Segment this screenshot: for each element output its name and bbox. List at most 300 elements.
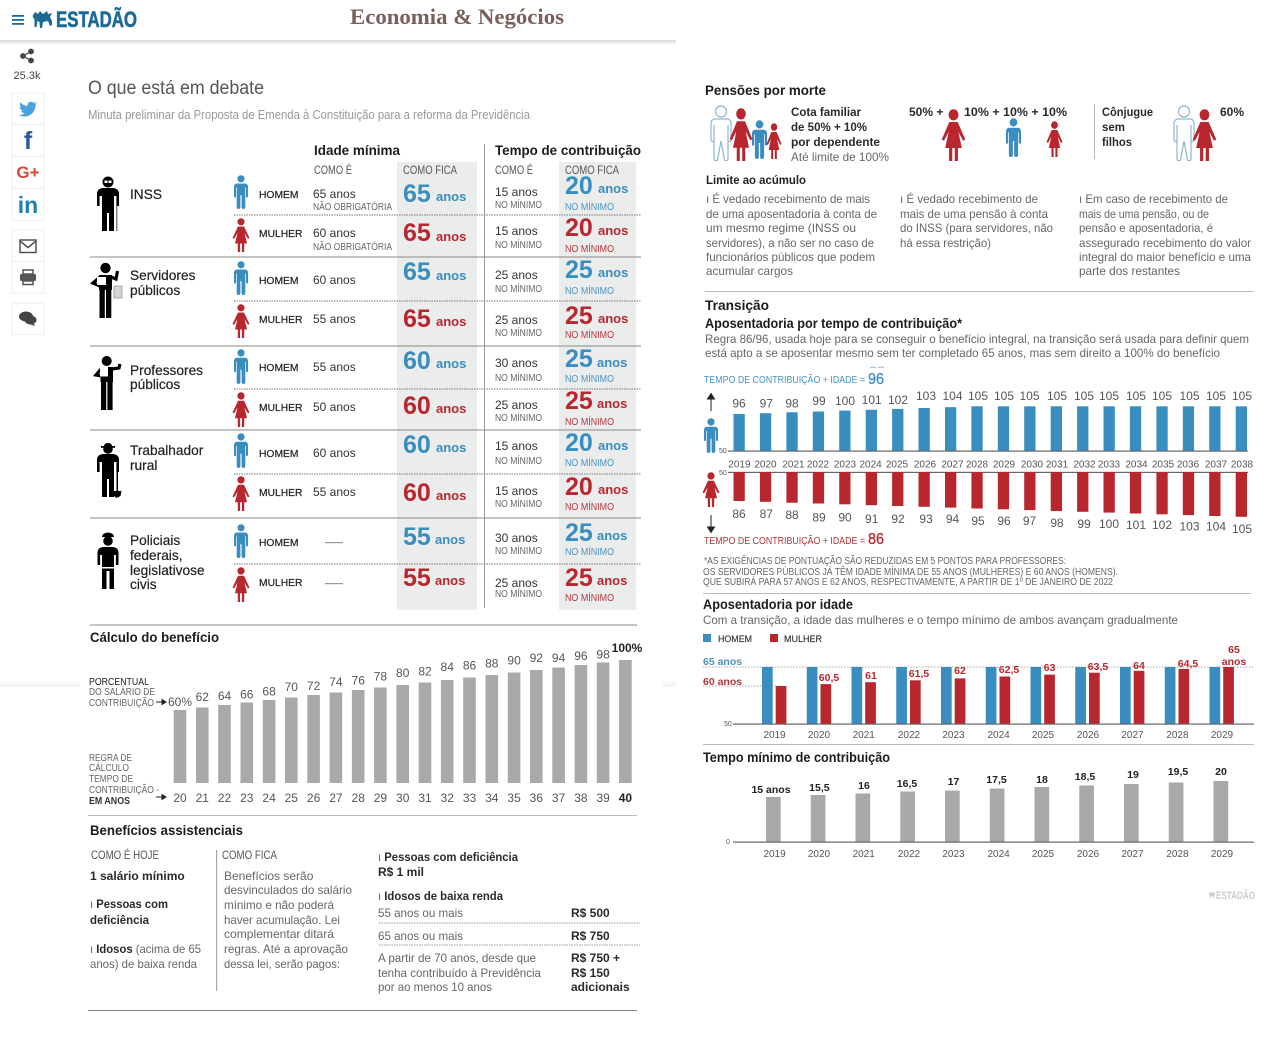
row: servidores mulher: NO MÍNIMO (565, 328, 614, 341)
values: women: 98 (1050, 516, 1064, 530)
legend (703, 634, 822, 645)
bars (766, 781, 1228, 842)
values: men: 96 (732, 396, 746, 410)
row: professores homem: anos (436, 356, 466, 371)
label: públicos (130, 377, 180, 392)
highlighted como fica columns (397, 162, 636, 610)
column: como é hoje: ı Pessoas com (90, 897, 168, 911)
axis and years: 2026 (914, 460, 937, 470)
axis and years: 2019 (763, 730, 786, 741)
row: rural homem: NO MÍNIMO (495, 454, 542, 467)
year labels: 27 (329, 791, 343, 805)
row: rural homem: 15 anos (495, 439, 538, 453)
row: servidores mulher: 25 (565, 302, 593, 330)
icon: menu (12, 15, 24, 25)
row: servidores homem: NO MÍNIMO (495, 282, 542, 295)
axis and years: 2023 (942, 730, 965, 741)
percentage labels: 74 (329, 675, 343, 689)
row: professores mulher: NO MÍNIMO (495, 411, 542, 424)
values: men: 100 (835, 394, 855, 408)
year labels: 31 (418, 791, 432, 805)
values: men: 105 (1019, 389, 1040, 403)
axis and years: 2034 (1125, 460, 1148, 470)
heading: Benefícios assistenciais (90, 823, 243, 838)
values: 61 (865, 670, 877, 682)
values: women: 104 (1206, 520, 1226, 534)
values: women: 94 (946, 512, 959, 526)
percentage labels: 98 (596, 648, 610, 662)
label (130, 363, 203, 392)
axis and years: 2033 (1098, 460, 1121, 470)
percentage labels: 80 (396, 666, 410, 680)
icon: teacher (96, 356, 120, 410)
limit column 1: acumular cargos (706, 264, 793, 278)
subtitle: Minuta preliminar da Proposta de Emenda à Constituição para a reforma da Previdência (88, 108, 530, 122)
icon: retiree with cane (97, 176, 119, 231)
row: servidores homem: 25 (565, 256, 593, 284)
values: women: 100 (1099, 517, 1119, 531)
axis and years: 50 (719, 470, 727, 477)
label: men score: 96 (868, 371, 884, 388)
arrow: down (708, 515, 714, 532)
row: servidores homem: HOMEM (259, 276, 298, 287)
source logo: ESTADÃO (1216, 889, 1255, 902)
column: valores: 65 anos ou mais (378, 929, 463, 943)
column: valores (378, 850, 640, 994)
row: servidores homem: 65 (403, 258, 431, 286)
row: INSS homem: 20 (565, 172, 593, 200)
row: policiais mulher: 25 anos (495, 576, 538, 590)
row: INSS homem: 65 anos (313, 187, 356, 201)
bars: women (734, 472, 1247, 517)
row: rural homem: anos (436, 440, 466, 455)
year labels: 21 (196, 791, 209, 805)
panel: cálculo do benefício (88, 630, 643, 816)
values: 16 (858, 780, 870, 792)
label: women score (704, 531, 884, 548)
column: como é hoje: anos) de baixa renda (90, 957, 197, 971)
row: professores homem: NO MÍNIMO (495, 371, 542, 384)
column: como fica: desvinculados do salário (224, 883, 352, 897)
percentage labels: 78 (374, 670, 387, 684)
values: men: 103 (916, 389, 936, 403)
panel: minimum age and contribution table (90, 143, 641, 625)
heading: Aposentadoria por idade (703, 597, 853, 612)
row: policiais homem: NO MÍNIMO (565, 545, 614, 558)
percentage labels: 88 (485, 656, 499, 670)
row: professores homem: 25 (565, 345, 593, 373)
column: valores: ı Pessoas com deficiência (378, 850, 518, 864)
axis captions: DO SALÁRIO DE (89, 685, 155, 698)
quota breakdown: 10% + 10% + 10% (964, 105, 1067, 119)
axis and years (719, 448, 1254, 477)
label (130, 443, 204, 473)
column: valores: R$ 750 (571, 929, 610, 943)
values: 15,5 (809, 782, 830, 794)
row: INSS homem: HOMEM (259, 190, 298, 201)
axis and years: 2029 (1211, 730, 1234, 741)
row: professores mulher: 25 anos (495, 398, 538, 412)
description: Com a transição, a idade das mulheres e o tempo mínimo de ambos avançam gradualmente (703, 613, 1178, 627)
row: servidores homem: anos (436, 268, 466, 283)
row: professores mulher: NO MÍNIMO (565, 415, 614, 428)
row: rural mulher: 20 (565, 473, 593, 501)
values: anos (1222, 656, 1246, 668)
family quota text: Até limite de 100% (791, 150, 889, 164)
axis and years: 2024 (987, 849, 1010, 860)
row: rural homem: 20 (565, 429, 593, 457)
axis and years: 2037 (1205, 460, 1228, 470)
column: valores: R$ 500 (571, 906, 610, 920)
icon: comments (19, 312, 36, 326)
values: 65 (1228, 644, 1240, 656)
values: men: 105 (968, 389, 988, 403)
share count: 25.3k (14, 70, 41, 82)
axis and years: 2020 (754, 460, 777, 470)
limit column 2: mais de uma pensão à conta (900, 207, 1048, 221)
family quota text: Cota familiar (791, 105, 861, 119)
limit column 1: ı É vedado recebimento de mais (706, 191, 870, 206)
values: women: 87 (760, 507, 773, 521)
values: women: 95 (971, 514, 985, 528)
limit column 1: um mesmo regime (INSS ou (706, 221, 856, 235)
row: servidores mulher: 25 anos (495, 313, 538, 327)
row: professores homem: 60 (403, 347, 431, 375)
icon: woman (702, 472, 720, 507)
legend: HOMEM (718, 634, 752, 645)
row: servidores homem: anos (598, 265, 628, 280)
percentage labels: 92 (530, 651, 543, 665)
icon: linkedin: in (18, 192, 38, 218)
source logo (1209, 889, 1255, 902)
bars: men (762, 667, 1220, 724)
icon: facebook: f (24, 127, 33, 155)
footnote (703, 554, 1118, 588)
percentage labels: 64 (218, 689, 231, 703)
column: como é hoje: ı Idosos (acima de 65 (90, 942, 201, 956)
column: como fica: mínimo e não poderá (224, 898, 334, 912)
values: men: 105 (1206, 389, 1226, 403)
axis captions: EM ANOS (89, 795, 130, 807)
values (819, 644, 1246, 684)
row: policiais mulher: 25 (565, 564, 593, 592)
heading: Cálculo do benefício (90, 630, 219, 645)
axis and years: 2022 (898, 849, 921, 860)
row: policiais mulher: anos (435, 573, 465, 588)
values: men: 102 (888, 393, 908, 407)
values: 62 (954, 665, 966, 677)
icon: police officer (98, 532, 118, 589)
percentage labels: 84 (441, 660, 454, 674)
row: INSS mulher: MULHER (259, 229, 302, 240)
column: valores: R$ 150 (571, 966, 610, 980)
axis and years: 2026 (1077, 849, 1100, 860)
values: 63 (1044, 662, 1055, 674)
axis and years: 2026 (1077, 730, 1100, 741)
percentage labels: 96 (574, 649, 588, 663)
row: rural mulher: MULHER (259, 488, 302, 499)
row: rural homem: anos (598, 438, 628, 453)
row: servidores mulher (232, 302, 628, 341)
limit column 2: ı É vedado recebimento de (900, 191, 1038, 206)
row: policiais homem (234, 519, 627, 558)
arrow: up (708, 394, 714, 411)
axis and years: 2021 (853, 730, 875, 741)
label: men score (704, 367, 884, 388)
row: servidores mulher: 65 (403, 305, 431, 333)
family quota text (791, 105, 889, 164)
reference labels: 60 anos (703, 676, 742, 688)
row: professores mulher: 50 anos (313, 400, 356, 414)
row: servidores homem: NO MÍNIMO (565, 284, 614, 297)
values: women: 86 (732, 507, 746, 521)
values: men: 99 (812, 394, 826, 408)
panel: benefícios assistenciais (88, 823, 640, 1011)
percentage labels (168, 641, 643, 709)
axis and years: 2023 (834, 460, 857, 470)
values: 17,5 (986, 774, 1007, 786)
values: 19,5 (1168, 766, 1188, 778)
row: INSS mulher: NÃO OBRIGATÓRIA (313, 240, 392, 253)
values: men: 105 (1126, 389, 1146, 403)
description (705, 332, 1249, 360)
values (751, 766, 1227, 796)
row: INSS homem: 65 (403, 180, 431, 208)
axis and years: 50 (719, 448, 727, 455)
row: rural homem: NO MÍNIMO (565, 456, 614, 469)
year labels: 22 (218, 791, 231, 805)
year labels (173, 791, 632, 805)
quota breakdown (909, 105, 1067, 161)
limit column 2 (900, 191, 1053, 250)
axis captions: CÁLCULO (89, 761, 129, 774)
row: professores homem: 55 anos (313, 360, 356, 374)
percentage labels: 76 (352, 674, 365, 688)
column: como fica: regras. Até a aprovação (224, 942, 348, 956)
percentage labels: 100% (612, 641, 643, 655)
row: professores mulher: 60 (403, 392, 431, 420)
row: professores mulher: anos (597, 396, 627, 411)
column: como é hoje: deficiência (90, 913, 149, 927)
values: 19 (1127, 769, 1139, 781)
spouse without children: Cônjugue (1102, 105, 1153, 119)
row: rural mulher: anos (436, 488, 466, 503)
label: Professores (130, 363, 203, 378)
axis and years: 2025 (1032, 730, 1055, 741)
column: valores: adicionais (571, 980, 630, 994)
row: INSS mulher: 65 (403, 219, 431, 247)
row: policiais homem: 55 (403, 523, 431, 551)
values: men: 105 (1152, 389, 1172, 403)
icon: civil servant (93, 263, 122, 318)
heading: Pensões por morte (705, 83, 826, 98)
percentage labels: 86 (463, 658, 476, 672)
label: Policiais (130, 533, 180, 548)
axis and years: 50 (724, 721, 732, 728)
group: Professores públicos (96, 345, 627, 428)
limit column 3: ı Em caso de recebimento de (1079, 192, 1228, 206)
axis and years: 2022 (807, 460, 830, 470)
axis and years: 2021 (853, 849, 875, 860)
limit column 3: assegurado recebimento do valor (1079, 236, 1251, 250)
values: men: 105 (994, 389, 1014, 403)
values: women: 103 (1179, 520, 1200, 534)
row: INSS mulher: anos (598, 223, 628, 238)
row: servidores mulher: MULHER (259, 315, 302, 326)
year labels: 33 (463, 791, 476, 805)
group: INSS (97, 172, 628, 255)
row: INSS homem: anos (436, 189, 466, 204)
axis and years: 2030 (1021, 460, 1044, 470)
year labels: 35 (507, 791, 521, 805)
row: policiais homem: NO MÍNIMO (495, 544, 542, 557)
values: 18 (1036, 774, 1048, 786)
row: servidores mulher: NO MÍNIMO (495, 326, 542, 339)
row: INSS mulher (232, 214, 628, 255)
spouse without children: sem (1102, 120, 1125, 134)
row: servidores mulher: 55 anos (313, 312, 356, 326)
column: valores: por ao menos 10 anos (378, 980, 492, 994)
values: men: 105 (1179, 389, 1200, 403)
label (130, 533, 205, 592)
panel: aposentadoria por idade (703, 597, 1254, 745)
panel: tempo mínimo de contribuição (703, 750, 1254, 860)
axis and years (726, 839, 1254, 860)
column: valores: A partir de 70 anos, desde que (378, 951, 536, 965)
year labels: 25 (285, 791, 298, 805)
axis and years: 2027 (1121, 849, 1144, 860)
row: policiais homem: 25 (565, 519, 593, 547)
label (130, 268, 196, 298)
row: INSS mulher: 20 (565, 214, 593, 242)
section name: Economia & Negócios (350, 4, 564, 29)
percentage labels: 90 (507, 654, 521, 668)
limit column 3: integral do maior benefício e uma (1079, 250, 1251, 264)
label: INSS (130, 187, 162, 202)
axis and years: 2028 (1166, 730, 1189, 741)
footnote: OS SERVIDORES PÚBLICOS JÁ TÊM IDADE MÍNIMA DE 55 ANOS (MULHERES) E 60 ANOS (HOMENS). (703, 565, 1118, 578)
values: 60,5 (819, 672, 839, 684)
column: valores: tenha contribuído à Previdência (378, 966, 541, 980)
label: federais, (130, 548, 182, 563)
table headings: COMO FICA (565, 165, 619, 177)
row: policiais mulher: anos (597, 573, 627, 588)
icon: man (704, 418, 718, 453)
panel: pensões por morte (705, 83, 1254, 292)
axis and years: 2036 (1177, 460, 1200, 470)
row: INSS homem (234, 172, 628, 213)
values: 18,5 (1075, 771, 1095, 783)
heading: Tempo mínimo de contribuição (703, 750, 890, 765)
year labels: 32 (441, 791, 454, 805)
icon: twitter (19, 101, 38, 117)
quota breakdown: 50% + (909, 105, 943, 119)
row: policiais mulher (232, 564, 627, 604)
icon: family (711, 106, 782, 161)
values: men: 97 (760, 396, 773, 410)
label: legislativose (130, 563, 205, 578)
axis and years: 2027 (1121, 730, 1144, 741)
values: 64 (1133, 660, 1145, 672)
axis and years: 2029 (993, 460, 1016, 470)
percentage labels: 82 (418, 664, 432, 678)
row: policiais mulher: NO MÍNIMO (495, 587, 542, 600)
reference labels (703, 656, 1254, 688)
values: women: 89 (812, 510, 826, 524)
row: professores homem: anos (597, 355, 627, 370)
row: INSS mulher: NO MÍNIMO (565, 242, 614, 255)
values: women: 91 (865, 512, 879, 526)
values: women: 99 (1077, 517, 1091, 531)
label: women score: 86 (868, 531, 884, 548)
icon: share (21, 49, 33, 63)
reference labels: 65 anos (703, 656, 742, 668)
bars: men (734, 406, 1247, 451)
row: policiais homem: anos (597, 528, 627, 543)
legend: MULHER (784, 634, 822, 645)
axis and years: 2027 (941, 460, 964, 470)
column: valores: 55 anos ou mais (378, 906, 463, 920)
values: men: 104 (942, 389, 963, 403)
values: 64,5 (1178, 658, 1198, 670)
icon: rural worker (97, 443, 122, 498)
row: INSS mulher: NO MÍNIMO (495, 238, 542, 251)
limit column 3: mais de uma pensão, ou de (1079, 207, 1209, 221)
values: women: 92 (891, 512, 905, 526)
axis and years: 2021 (782, 460, 805, 470)
column: valores: ı Idosos de baixa renda (378, 889, 503, 903)
row: INSS mulher: anos (436, 229, 466, 244)
row: professores homem: 30 anos (495, 356, 538, 370)
percentage labels: 68 (262, 684, 276, 698)
values: 17 (948, 776, 959, 788)
row: professores homem: NO MÍNIMO (565, 372, 614, 385)
axis and years: 2024 (859, 460, 882, 470)
row: policiais mulher: 55 (403, 564, 431, 592)
row: INSS homem: anos (598, 181, 628, 196)
row: rural mulher: NO MÍNIMO (565, 500, 614, 513)
bars (174, 660, 632, 783)
limit column 1 (706, 191, 877, 278)
values: 61,5 (909, 668, 929, 680)
label: civis (130, 577, 157, 592)
column: como fica: dessa lei, serão pagos: (224, 957, 340, 971)
values: women: 88 (785, 508, 799, 522)
axis and years: 2020 (808, 730, 831, 741)
year labels: 28 (352, 791, 365, 805)
label: Servidores (130, 268, 196, 283)
row: policiais homem: anos (435, 532, 465, 547)
spouse without children (1102, 105, 1244, 161)
values: men: 101 (862, 393, 882, 407)
axis captions: CONTRIBUIÇÃO - (89, 783, 159, 796)
percentage labels: 60% (168, 695, 192, 709)
subheading: Aposentadoria por tempo de contribuição* (705, 316, 963, 331)
column: como fica: complementar ditará (224, 927, 334, 941)
row: rural mulher: NO MÍNIMO (495, 497, 542, 510)
label: men score: TEMPO DE CONTRIBUIÇÃO + IDADE = (704, 373, 865, 386)
row: rural mulher (232, 473, 628, 513)
year labels: 40 (619, 791, 632, 805)
limit column 3: pensão e aposentadoria, é (1079, 221, 1213, 235)
share sidebar (12, 49, 44, 334)
limit column 3: parte dos restantes (1079, 264, 1180, 278)
values: men (732, 389, 1252, 410)
limit column 2: há essa restrição) (900, 236, 991, 250)
values: 15 anos (751, 784, 791, 796)
percentage labels: 70 (285, 680, 298, 694)
axis captions (89, 676, 159, 807)
